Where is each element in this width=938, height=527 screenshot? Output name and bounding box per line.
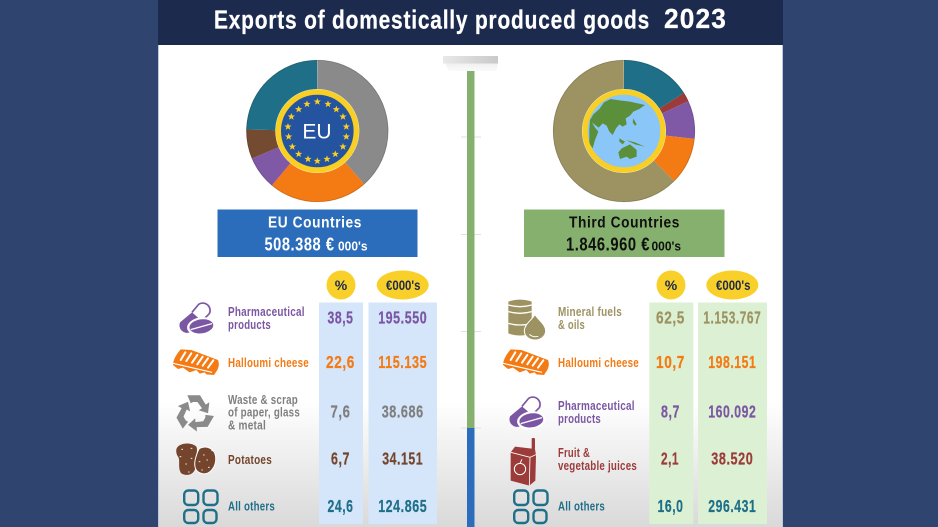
- row: pharmaceutical products (third): products: [558, 412, 601, 426]
- row: all others (third): All others: [558, 500, 605, 514]
- row: waste and scrap (EU): [172, 393, 424, 435]
- row: all others (EU): 24,6: [328, 496, 354, 516]
- left table column backgrounds and badges: €000's: [386, 278, 420, 293]
- row: all others (third): 296.431: [708, 496, 756, 516]
- row: halloumi cheese (third): 10,7: [656, 352, 685, 372]
- icon: potatoes: [176, 444, 216, 475]
- icon: oil barrel and drop: [508, 300, 546, 340]
- row: mineral fuels (third): Mineral fuels: [558, 305, 622, 319]
- row: halloumi cheese (EU): 115.135: [378, 352, 427, 372]
- left table column backgrounds and badges: %: [335, 277, 348, 293]
- icon: pills: [509, 397, 547, 431]
- row: waste and scrap (EU): 38.686: [382, 402, 424, 422]
- icon: recycle: [172, 395, 214, 435]
- row: pharmaceutical products (EU): Pharmaceutical: [228, 305, 305, 319]
- icon: grid: [514, 490, 548, 523]
- title banner: Exports of domestically produced goods: [214, 4, 650, 34]
- row: pharmaceutical products (EU): 195.550: [378, 308, 427, 328]
- icon: halloumi: [173, 349, 219, 375]
- icon: EU flag circle: EU: [302, 120, 332, 144]
- row: pharmaceutical products (third): 8,7: [661, 402, 680, 422]
- white panel: [158, 45, 783, 527]
- heading box: third countries: Third Countries: [569, 214, 680, 232]
- row: fruit and vegetable juices (third): Fruit &: [558, 446, 590, 460]
- right table column backgrounds and badges: €000's: [716, 278, 750, 293]
- row: fruit and vegetable juices (third): 38.520: [711, 448, 753, 468]
- donut chart: third countries: [553, 60, 695, 202]
- row: halloumi cheese (EU): [173, 349, 427, 375]
- left table column backgrounds and badges: [319, 270, 437, 524]
- row: halloumi cheese (third): [503, 349, 756, 375]
- title banner: 2023: [664, 3, 727, 34]
- row: all others (EU): [184, 490, 427, 523]
- title banner: [158, 0, 783, 45]
- row: potatoes (EU): Potatoes: [228, 453, 272, 467]
- heading box: third countries: 000's: [652, 238, 681, 254]
- row: potatoes (EU): [176, 444, 423, 475]
- row: mineral fuels (third): 62,5: [656, 308, 685, 328]
- heading box: EU countries: 000's: [338, 238, 368, 254]
- row: pharmaceutical products (third): [509, 397, 756, 431]
- right table column backgrounds and badges: [649, 270, 767, 524]
- heading box: third countries: [524, 210, 724, 257]
- row: waste and scrap (EU): 7,6: [330, 402, 350, 422]
- icon: halloumi: [503, 349, 549, 375]
- central divider bar: [443, 56, 498, 527]
- icon: grid: [184, 490, 218, 523]
- row: all others (third): 16,0: [658, 496, 684, 516]
- row: pharmaceutical products (third): 160.092: [708, 402, 756, 422]
- row: fruit and vegetable juices (third): 2,1: [661, 448, 679, 468]
- row: all others (third): [514, 490, 756, 523]
- row: waste and scrap (EU): Waste & scrap: [228, 393, 298, 407]
- row: potatoes (EU): 6,7: [331, 448, 350, 468]
- donut chart: EU countries: [247, 60, 388, 202]
- row: halloumi cheese (EU): Halloumi cheese: [228, 356, 309, 370]
- row: fruit and vegetable juices (third): [511, 438, 753, 486]
- heading box: third countries: 1.846.960 €: [566, 234, 650, 254]
- row: mineral fuels (third): & oils: [558, 318, 585, 332]
- row: all others (EU): 124.865: [378, 496, 427, 516]
- icon: EU flag circle: [278, 92, 356, 170]
- row: pharmaceutical products (EU): [179, 303, 427, 337]
- row: halloumi cheese (third): Halloumi cheese: [558, 356, 639, 370]
- right table column backgrounds and badges: %: [665, 277, 678, 293]
- heading box: EU countries: EU Countries: [268, 214, 362, 232]
- row: all others (EU): All others: [228, 500, 275, 514]
- row: mineral fuels (third): [508, 300, 761, 340]
- row: pharmaceutical products (EU): products: [228, 318, 271, 332]
- row: waste and scrap (EU): & metal: [228, 418, 266, 432]
- row: potatoes (EU): 34.151: [382, 448, 423, 468]
- row: pharmaceutical products (EU): 38,5: [328, 308, 354, 328]
- row: halloumi cheese (third): 198.151: [708, 352, 756, 372]
- row: pharmaceutical products (third): Pharmaceutical: [558, 399, 635, 413]
- heading box: EU countries: [218, 210, 418, 257]
- heading box: EU countries: 508.388 €: [264, 234, 334, 254]
- icon: pills: [179, 303, 217, 337]
- row: mineral fuels (third): 1.153.767: [703, 308, 761, 328]
- row: fruit and vegetable juices (third): vegetable juices: [558, 459, 637, 473]
- row: halloumi cheese (EU): 22,6: [326, 352, 355, 372]
- icon: globe: [585, 92, 663, 170]
- icon: juice carton: [511, 438, 536, 486]
- row: waste and scrap (EU): of paper, glass: [228, 406, 300, 420]
